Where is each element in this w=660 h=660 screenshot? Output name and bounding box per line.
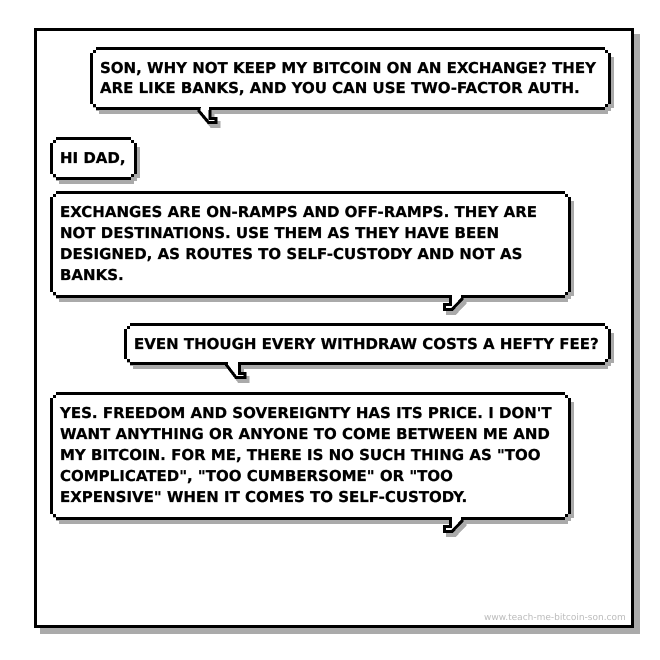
watermark url: www.teach-me-bitcoin-son.com — [484, 613, 626, 623]
speech bubble: freedom and sovereignty: EXPENSIVE" WHEN IT COMES TO SELF-CUSTODY. — [60, 488, 467, 506]
speech bubble: exchanges are on-ramps: BANKS. — [60, 266, 124, 284]
speech bubble: exchanges are on-ramps: EXCHANGES ARE ON-RAMPS AND OFF-RAMPS. THEY ARE — [60, 203, 537, 221]
speech bubble: freedom and sovereignty: MY BITCOIN. FOR ME, THERE IS NO SUCH THING AS "TOO — [60, 446, 541, 464]
speech bubble: freedom and sovereignty — [50, 392, 574, 536]
speech bubble: exchanges are on-ramps — [50, 191, 574, 314]
speech bubble: son asks about exchanges — [90, 47, 614, 126]
speech bubble: freedom and sovereignty: COMPLICATED", "TOO CUMBERSOME" OR "TOO — [60, 467, 453, 485]
speech bubble: withdraw fee question — [124, 323, 614, 382]
speech bubble: freedom and sovereignty: WANT ANYTHING OR ANYONE TO COME BETWEEN ME AND — [60, 425, 550, 443]
speech bubble: hi dad — [50, 137, 140, 184]
speech bubble: exchanges are on-ramps: NOT DESTINATIONS. USE THEM AS THEY HAVE BEEN — [60, 224, 499, 242]
speech bubble: hi dad: HI DAD, — [60, 149, 126, 167]
speech bubble: withdraw fee question: EVEN THOUGH EVERY WITHDRAW COSTS A HEFTY FEE? — [134, 335, 599, 353]
speech bubble: exchanges are on-ramps: DESIGNED, AS ROUTES TO SELF-CUSTODY AND NOT AS — [60, 245, 522, 263]
speech bubble: son asks about exchanges: ARE LIKE BANKS, AND YOU CAN USE TWO-FACTOR AUTH. — [100, 79, 580, 97]
speech bubble: freedom and sovereignty: YES. FREEDOM AND SOVEREIGNTY HAS ITS PRICE. I DON'T — [59, 404, 552, 422]
speech bubble: son asks about exchanges: SON, WHY NOT KEEP MY BITCOIN ON AN EXCHANGE? THEY — [100, 59, 597, 77]
